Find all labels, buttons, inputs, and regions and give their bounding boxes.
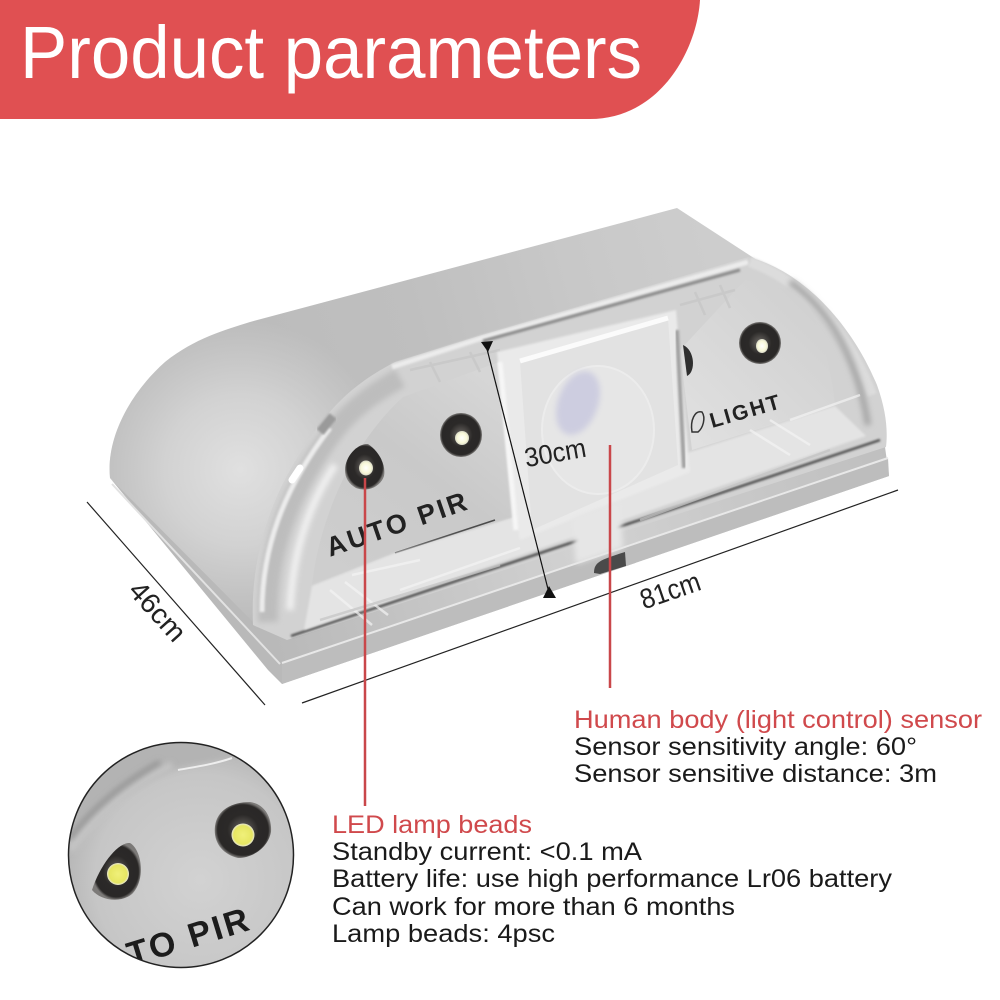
left inner panel [312,362,512,585]
inset LED right [215,802,271,858]
leader line: LED beads [364,478,366,806]
inset LED left [92,843,141,900]
header banner [0,0,700,119]
sensor callout [574,706,982,788]
leader line: sensor [609,445,611,688]
magnified LED inset [68,742,294,968]
panel bottom edge [395,520,495,553]
sensor callout: Sensor sensitivity angle: 60° [574,733,917,761]
clear cover dome [253,257,887,640]
length dimension line [302,490,898,703]
hand icon near LIGHT [692,412,704,432]
USB slot [594,552,626,574]
LED callout: Battery life: use high performance Lr06 battery [332,865,893,893]
lower clear strip [304,406,866,630]
LED callout [332,811,893,948]
LED callout: Can work for more than 6 months [332,893,735,921]
PIR lens [542,365,654,494]
title: Product parameters [20,11,642,94]
length label: 81cm [636,566,705,615]
label: AUTO PIR: AUTO PIR [322,486,473,563]
label: LIGHT: LIGHT [707,390,785,433]
LED bead left [440,413,482,457]
LED callout: LED lamp beads [332,811,532,839]
right inner panel [680,280,835,450]
clear tabs and ridges [320,285,860,625]
depth label: 46cm [123,575,193,648]
device base plate [110,447,889,684]
inset label: TO PIR [122,900,256,974]
LED bead far left [345,444,384,490]
sensor housing [497,310,693,564]
LED callout: Standby current: <0.1 mA [332,838,642,866]
height label: 30cm [522,433,588,473]
LED callout: Lamp beads: 4psc [332,920,555,948]
LED bead right [739,322,781,364]
device body [90,208,760,640]
sensor callout: Human body (light control) sensor [574,706,982,734]
product photo: door lock PIR light [90,208,889,684]
depth dimension line [87,502,265,705]
clear tab below sensor [572,502,623,564]
sensor callout: Sensor sensitive distance: 3m [574,760,937,788]
height dimension line [481,341,588,598]
